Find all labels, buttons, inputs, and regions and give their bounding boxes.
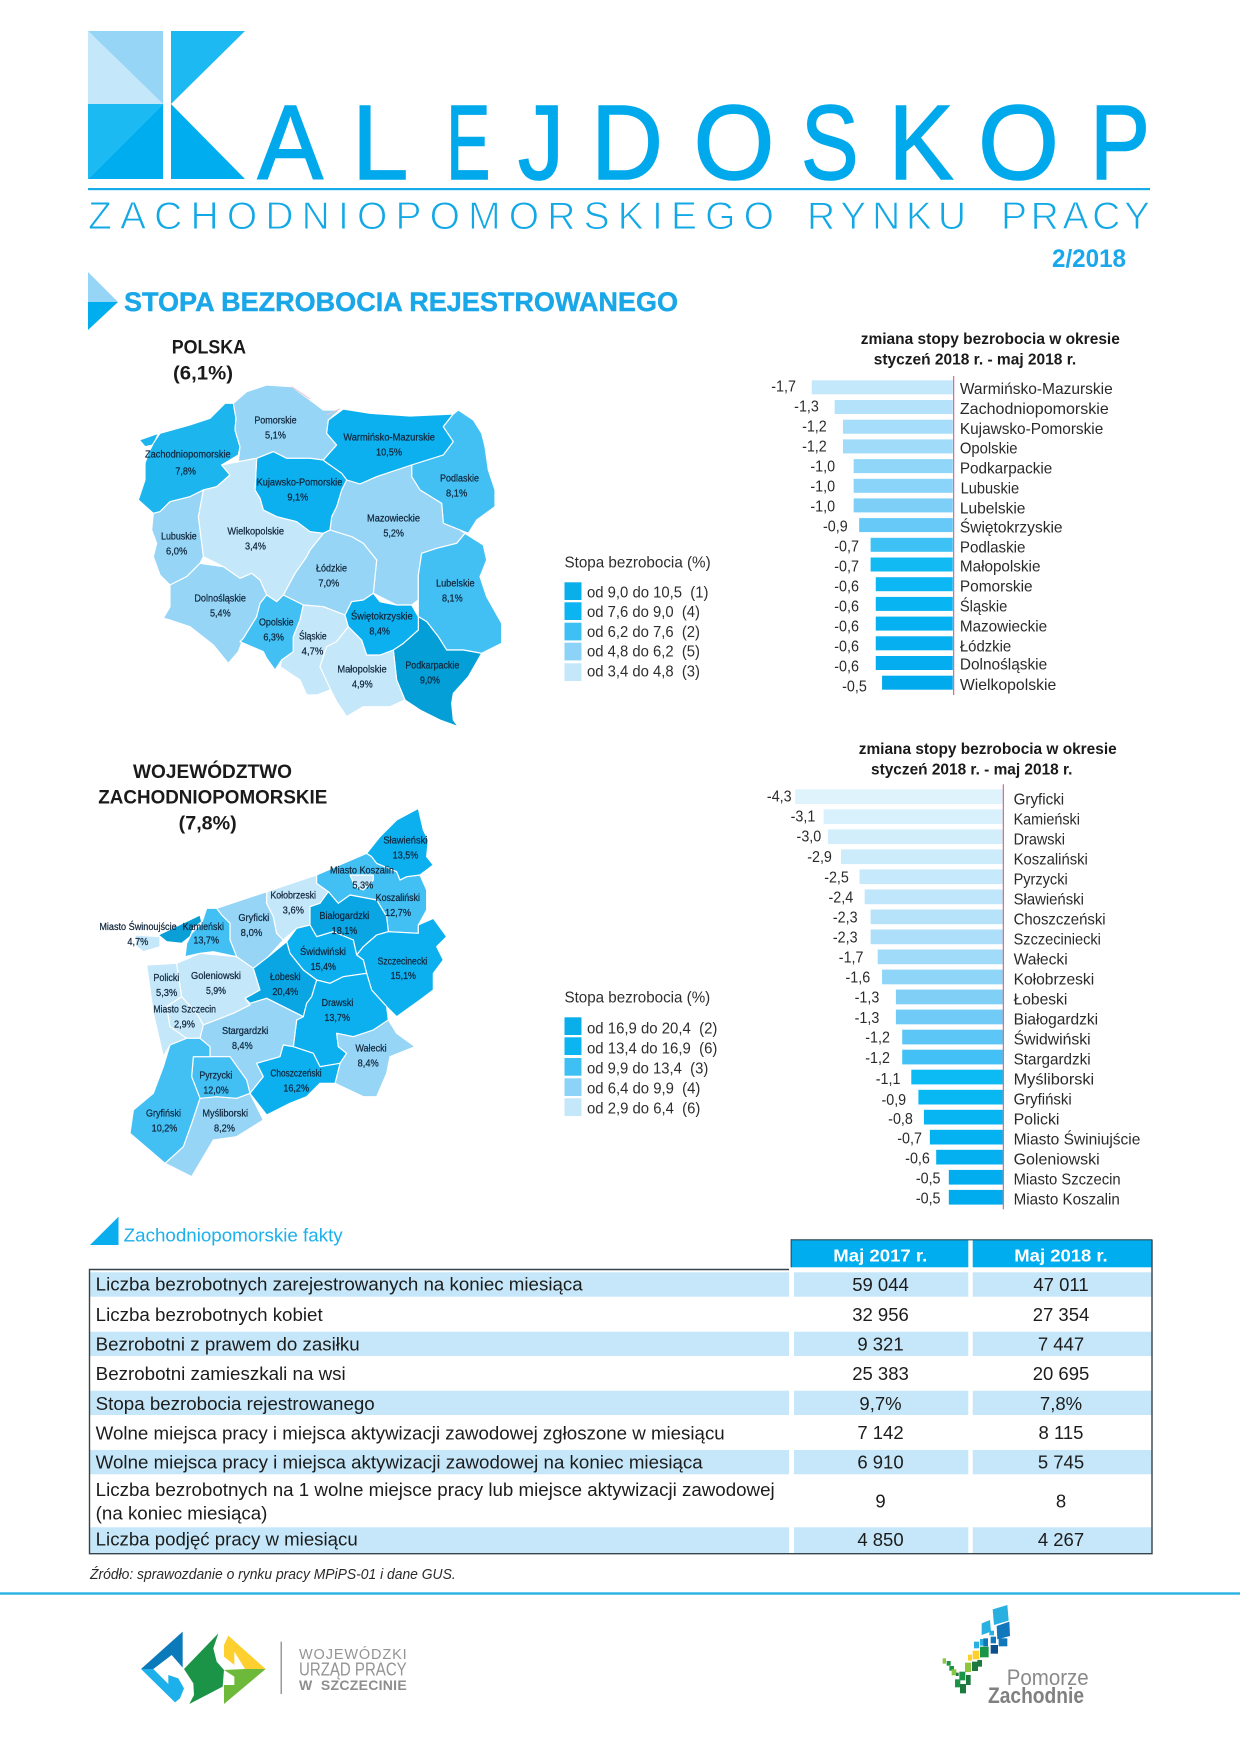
map: Zachodniopomorskie by county: Kołobrzeski	[270, 890, 316, 901]
legend: Zachodniopomorskie: od 6,4 do 9,9 (4)	[587, 1080, 700, 1097]
title: Kalejdoskop: P	[1090, 84, 1150, 202]
bar chart: Zachodniopomorskie change: -0,9	[881, 1092, 906, 1109]
section heading: STOPA BEZROBOCIA REJESTROWANEGO	[124, 287, 678, 317]
heading: Województwo zachodniopomorskie: ZACHODNIOPOMORSKIE	[98, 787, 327, 808]
bar chart: Zachodniopomorskie change: -1,2	[865, 1029, 890, 1047]
table values: Maj 2018: 4 267	[1038, 1529, 1084, 1550]
heading: Województwo zachodniopomorskie	[98, 761, 327, 834]
bar chart: Zachodniopomorskie change: Miasto Świniujście	[1014, 1129, 1141, 1148]
heading: Polska: (6,1%)	[173, 363, 233, 384]
subtitle: ZACHODNIOPOMORSKIEGO	[88, 195, 774, 238]
map: Zachodniopomorskie by county: 8,0%	[241, 928, 262, 939]
bar chart: Zachodniopomorskie change: Pyrzycki	[1014, 871, 1068, 888]
map: Zachodniopomorskie by county: 2,9%	[174, 1019, 195, 1030]
bar chart: Zachodniopomorskie change: Choszczeński	[1014, 911, 1106, 928]
bar chart: Zachodniopomorskie change: -2,4	[829, 889, 854, 907]
bar chart: Zachodniopomorskie change: Białogardzki	[1014, 1011, 1098, 1028]
map: Polska by voivodeship: Kujawsko-Pomorskie	[257, 477, 343, 488]
bar chart: Zachodniopomorskie change: -2,3	[833, 909, 858, 927]
bar chart: Zachodniopomorskie change: Sławieński	[1014, 891, 1084, 908]
legend: Polska: od 9,0 do 10,5 (1)	[587, 584, 708, 601]
table values: Maj 2018: 8 115	[1039, 1422, 1083, 1443]
map: Polska by voivodeship: 9,0%	[420, 675, 440, 686]
bar chart: Zachodniopomorskie change: Gryficki	[1014, 791, 1064, 808]
legend: Polska	[564, 554, 711, 681]
map: Polska by voivodeship: Śląskie	[299, 629, 327, 642]
bar chart: Zachodniopomorskie change: -2,5	[824, 869, 849, 887]
map: Zachodniopomorskie by county: Wałecki	[355, 1044, 387, 1055]
title: Kalejdoskop: D	[591, 84, 663, 202]
bar chart: Polska change: -1,7	[771, 378, 796, 396]
map: Zachodniopomorskie by county: 4,7%	[127, 937, 148, 948]
map: Polska by voivodeship: Mazowieckie	[367, 513, 420, 524]
bar chart: Polska change: Małopolskie	[960, 558, 1041, 575]
chart title: Polska change	[861, 331, 1120, 368]
table row labels: Bezrobotni z prawem do zasiłku	[96, 1334, 360, 1355]
table row labels: Liczba podjęć pracy w miesiącu	[96, 1529, 358, 1550]
legend: Zachodniopomorskie: od 9,9 do 13,4 (3)	[587, 1060, 708, 1077]
title: Kalejdoskop: O	[694, 84, 774, 202]
table row stripes	[90, 1272, 1152, 1553]
map: Polska by voivodeship: 8,4%	[369, 626, 390, 637]
logo separator and Wojewódzki Urząd Pracy wordmark: WOJEWÓDZKI	[299, 1646, 407, 1663]
bar chart: Zachodniopomorskie change: Drawski	[1014, 831, 1065, 848]
logo: Pomorze Zachodnie wordmark: Zachodnie	[988, 1683, 1084, 1708]
map: Zachodniopomorskie by county: Miasto Świnoujście	[99, 920, 177, 933]
subtitle: PRACY	[1001, 195, 1150, 238]
subtitle	[88, 195, 1150, 238]
title: Kalejdoskop: O	[978, 84, 1059, 202]
bar chart: Zachodniopomorskie change: Koszaliński	[1014, 851, 1088, 868]
logo: Pomorze Zachodnie wordmark	[988, 1665, 1089, 1708]
bar chart: Polska change: -0,9	[823, 518, 848, 536]
bar chart: Zachodniopomorskie change: -1,3	[855, 989, 879, 1007]
map: Polska by voivodeship: Łódzkie	[316, 563, 347, 574]
map: Zachodniopomorskie by county: Łobeski	[270, 972, 301, 983]
bar chart: Zachodniopomorskie change: Miasto Koszalin	[1014, 1191, 1120, 1208]
table row labels: Bezrobotni zamieszkali na wsi	[96, 1363, 346, 1384]
map: Polska by voivodeship: Małopolskie	[337, 664, 387, 675]
bar chart: Polska change: -1,2	[802, 418, 827, 436]
map: Zachodniopomorskie by county: Drawski	[322, 998, 353, 1009]
bar chart: Polska change: Opolskie	[960, 440, 1018, 457]
table values: Maj 2017: 9	[875, 1491, 886, 1512]
bar chart: Zachodniopomorskie change: -2,3	[833, 929, 858, 947]
bar chart: Polska change: -1,0	[810, 498, 835, 516]
table values: Maj 2017: 6 910	[857, 1452, 904, 1473]
map: Polska by voivodeship: Świętokrzyskie	[351, 609, 413, 622]
map: Zachodniopomorskie by county: Miasto Szczecin	[153, 1004, 216, 1015]
map: Zachodniopomorskie by county: Stargardzki	[222, 1026, 268, 1037]
bar chart: Zachodniopomorskie change: -0,5	[916, 1190, 941, 1208]
bar chart: Zachodniopomorskie change: Goleniowski	[1014, 1151, 1100, 1168]
heading: Województwo zachodniopomorskie: (7,8%)	[179, 813, 237, 834]
bar chart: Polska change: -0,6	[834, 638, 859, 656]
bar chart: Polska change: -0,7	[834, 558, 859, 576]
bar chart: Zachodniopomorskie change: -4,3	[767, 788, 792, 806]
map: Zachodniopomorskie by county: Choszczeński	[270, 1069, 322, 1080]
table values: Maj 2018: 20 695	[1033, 1363, 1089, 1384]
bar chart: Polska change: -1,3	[794, 398, 819, 416]
footer rule	[0, 1592, 1240, 1595]
map: Zachodniopomorskie by county: Gryfiński	[146, 1109, 181, 1120]
bar chart: Zachodniopomorskie change: -3,1	[791, 808, 815, 826]
chart title: Polska change: styczeń 2018 r. - maj 2018 r.	[874, 351, 1076, 368]
bar chart: Zachodniopomorskie change: -0,6	[905, 1150, 930, 1168]
map: Polska by voivodeship: 6,3%	[263, 632, 284, 643]
map: Zachodniopomorskie by county: 8,4%	[232, 1041, 253, 1052]
map: Zachodniopomorskie by county: Myśliborski	[202, 1109, 248, 1120]
logo: Wojewódzki Urząd Pracy icon	[141, 1632, 266, 1704]
map: Zachodniopomorskie by county: 5,9%	[206, 986, 226, 997]
map: Zachodniopomorskie by county: 12,7%	[385, 908, 411, 919]
table values: Maj 2018	[1033, 1274, 1089, 1550]
map: Zachodniopomorskie by county: Miasto Koszalin	[330, 865, 394, 876]
bar chart: Polska change: Świętokrzyskie	[960, 517, 1063, 536]
logo separator and Wojewódzki Urząd Pracy wordmark	[280, 1642, 407, 1694]
table values: Maj 2017	[852, 1274, 909, 1550]
title: Kalejdoskop: E	[446, 84, 490, 202]
legend: Zachodniopomorskie: od 16,9 do 20,4 (2)	[587, 1020, 717, 1037]
bar chart: Polska change: -1,0	[810, 458, 835, 476]
bar chart: Polska change: Podlaskie	[960, 539, 1026, 556]
map: Zachodniopomorskie by county: 3,6%	[283, 905, 304, 916]
map: Zachodniopomorskie by county	[99, 808, 447, 1177]
legend: Polska: Stopa bezrobocia (%)	[564, 554, 711, 571]
table values: Maj 2017: 4 850	[857, 1529, 904, 1550]
bar chart: Zachodniopomorskie change: -1,6	[846, 969, 870, 987]
map: Polska by voivodeship	[138, 385, 502, 727]
bar chart: Polska change: -0,6	[834, 598, 859, 616]
issue number: 2/2018	[1052, 245, 1126, 273]
bar chart: Polska change: -0,7	[834, 538, 859, 556]
legend: Polska: od 3,4 do 4,8 (3)	[587, 663, 700, 681]
section icon: facts triangle	[90, 1217, 118, 1245]
bar chart: Zachodniopomorskie change: -1,3	[855, 1010, 879, 1027]
heading: facts: Zachodniopomorskie fakty	[124, 1226, 343, 1246]
bar chart: Polska change: -0,6	[834, 618, 859, 636]
map: Polska by voivodeship: 6,0%	[166, 546, 187, 557]
bar chart: Zachodniopomorskie change: Szczeciniecki	[1014, 931, 1101, 948]
map: Polska by voivodeship: Warmińsko-Mazurskie	[343, 432, 435, 443]
map: Zachodniopomorskie by county: Świdwiński	[300, 945, 346, 958]
map: Zachodniopomorskie by county: Gryficki	[238, 913, 269, 924]
bar chart: Polska change: -0,6	[834, 658, 859, 676]
map: Polska by voivodeship: 4,9%	[352, 679, 373, 690]
bar chart: Zachodniopomorskie change: Kołobrzeski	[1014, 971, 1094, 988]
bar chart: Polska change: Pomorskie	[960, 578, 1033, 595]
map: Zachodniopomorskie by county: Szczecinecki	[378, 956, 427, 967]
table row labels: (na koniec miesiąca)	[96, 1502, 267, 1523]
legend: Zachodniopomorskie: od 2,9 do 6,4 (6)	[587, 1100, 700, 1117]
table border	[90, 1240, 1152, 1554]
legend: Polska: od 6,2 do 7,6 (2)	[587, 624, 700, 641]
heading: Polska	[172, 337, 246, 384]
bar chart: Zachodniopomorskie change: -1,7	[839, 949, 864, 967]
chart title: Zachodniopomorskie change	[859, 741, 1117, 778]
map: Zachodniopomorskie by county: 15,1%	[391, 971, 416, 982]
chart title: Polska change: zmiana stopy bezrobocia w okresie	[861, 331, 1120, 348]
bar chart: Polska change: -1,0	[810, 478, 835, 496]
map: Zachodniopomorskie by county: Białogardzki	[319, 911, 369, 922]
bar chart: Polska change: Zachodniopomorskie	[960, 401, 1109, 418]
bar chart: Zachodniopomorskie change: -2,9	[807, 849, 832, 866]
chart title: Zachodniopomorskie change: styczeń 2018 r. - maj 2018 r.	[871, 761, 1072, 778]
table row labels: Wolne miejsca pracy i miejsca aktywizacji zawodowej zgłoszone w miesiącu	[96, 1422, 725, 1443]
map: Zachodniopomorskie by county: 12,0%	[203, 1085, 229, 1096]
table values: Maj 2018: 5 745	[1038, 1452, 1084, 1473]
map: Polska by voivodeship: 5,4%	[210, 608, 231, 619]
bar chart: Zachodniopomorskie change: Stargardzki	[1014, 1051, 1091, 1068]
map: Polska by voivodeship: 9,1%	[287, 492, 308, 503]
map: Polska by voivodeship: Pomorskie	[254, 415, 297, 426]
map: Polska by voivodeship: Opolskie	[259, 617, 294, 628]
legend: Zachodniopomorskie	[564, 989, 717, 1117]
bar chart: Zachodniopomorskie change: Kamieński	[1014, 811, 1080, 828]
map: Polska by voivodeship: Lubuskie	[161, 531, 197, 542]
title: Kalejdoskop: A	[258, 84, 323, 202]
legend: Polska: od 7,6 do 9,0 (4)	[587, 604, 700, 621]
map: Zachodniopomorskie by county: Goleniowski	[191, 971, 241, 982]
map: Polska by voivodeship: 3,4%	[245, 541, 266, 552]
chart title: Zachodniopomorskie change: zmiana stopy bezrobocia w okresie	[859, 741, 1117, 758]
map: Polska by voivodeship: 8,1%	[446, 488, 467, 499]
table header: Maj 2017 r.	[833, 1246, 927, 1266]
title: Kalejdoskop: J	[518, 84, 564, 202]
bar chart: Polska change: Śląskie	[960, 596, 1007, 615]
table values: Maj 2018: 7 447	[1038, 1334, 1084, 1355]
subtitle: RYNKU	[807, 195, 966, 238]
bar chart: Zachodniopomorskie change	[767, 784, 1141, 1209]
title: Kalejdoskop: K	[888, 84, 954, 202]
bar chart: Zachodniopomorskie change: Łobeski	[1014, 991, 1067, 1008]
bar chart: Zachodniopomorskie change: Wałecki	[1014, 951, 1068, 968]
bar chart: Polska change: -0,6	[834, 578, 859, 596]
bar chart: Zachodniopomorskie change: Świdwiński	[1014, 1029, 1091, 1048]
table values: Maj 2018: 47 011	[1033, 1274, 1089, 1295]
map: Zachodniopomorskie by county: Policki	[153, 973, 179, 984]
logo separator and Wojewódzki Urząd Pracy wordmark: W SZCZECINIE	[299, 1677, 407, 1693]
bar chart: Polska change: Dolnośląskie	[960, 656, 1047, 673]
legend: Zachodniopomorskie: Stopa bezrobocia (%)	[564, 989, 710, 1006]
bar chart: Zachodniopomorskie change: -0,7	[897, 1130, 922, 1148]
map: Zachodniopomorskie by county: Koszaliński	[376, 893, 420, 904]
bar chart: Zachodniopomorskie change: Myśliborski	[1014, 1071, 1094, 1088]
map: Zachodniopomorskie by county: 16,2%	[283, 1084, 309, 1095]
map: Polska by voivodeship: Podlaskie	[440, 473, 479, 484]
bar chart: Zachodniopomorskie change: -0,5	[916, 1170, 941, 1188]
legend: Polska: od 4,8 do 6,2 (5)	[587, 643, 700, 661]
map: Zachodniopomorskie by county: 5,3%	[352, 880, 373, 891]
table row labels: Wolne miejsca pracy i miejsca aktywizacji zawodowej na koniec miesiąca	[96, 1452, 703, 1473]
map: Polska by voivodeship: 8,1%	[442, 593, 463, 604]
map: Zachodniopomorskie by county: 10,2%	[152, 1124, 177, 1135]
bar chart: Polska change: -0,5	[842, 678, 867, 696]
map: Zachodniopomorskie by county: Kamieński	[183, 922, 224, 933]
map: Zachodniopomorskie by county: 8,4%	[358, 1059, 379, 1070]
bar chart: Polska change: Wielkopolskie	[960, 677, 1056, 694]
section icon: arrow	[88, 272, 118, 330]
map: Polska by voivodeship: Lubelskie	[436, 578, 475, 589]
bar chart: Polska change: Warmińsko-Mazurskie	[960, 381, 1113, 398]
table values: Maj 2018: 27 354	[1033, 1304, 1089, 1325]
bar chart: Polska change: Łódzkie	[960, 638, 1011, 655]
map: Zachodniopomorskie by county: Sławieński	[383, 835, 427, 846]
map: Zachodniopomorskie by county: 13,7%	[324, 1013, 350, 1024]
bar chart: Polska change	[771, 376, 1113, 696]
map: Zachodniopomorskie by county: 13,5%	[393, 850, 418, 861]
table values: Maj 2018: 7,8%	[1040, 1393, 1082, 1414]
table values: Maj 2017: 9,7%	[859, 1393, 902, 1414]
source note: Źródło: sprawozdanie o rynku pracy MPiPS-01 i dane GUS.	[89, 1566, 456, 1583]
bar chart: Zachodniopomorskie change: Gryfiński	[1014, 1091, 1072, 1108]
bar chart: Polska change: Podkarpackie	[960, 460, 1052, 477]
title: Kalejdoskop: S	[801, 84, 858, 202]
map: Polska by voivodeship: 5,1%	[265, 430, 286, 441]
bar chart: Polska change: Lubelskie	[960, 500, 1026, 517]
table header: Maj 2018 r.	[1014, 1246, 1108, 1266]
map: Zachodniopomorskie by county: 5,3%	[156, 988, 177, 999]
bar chart: Zachodniopomorskie change: -1,2	[865, 1050, 890, 1067]
table values: Maj 2017: 59 044	[852, 1274, 909, 1295]
table row labels: Liczba bezrobotnych na 1 wolne miejsce pracy lub miejsce aktywizacji zawodowej	[96, 1479, 775, 1500]
table row labels: Liczba bezrobotnych zarejestrowanych na koniec miesiąca	[96, 1274, 583, 1295]
heading: Województwo zachodniopomorskie: WOJEWÓDZTWO	[133, 761, 292, 783]
map: Zachodniopomorskie by county: 20,4%	[272, 987, 298, 998]
legend: Zachodniopomorskie: od 13,4 do 16,9 (6)	[587, 1040, 717, 1057]
table header	[791, 1239, 1152, 1267]
map: Zachodniopomorskie by county: Pyrzycki	[199, 1070, 232, 1081]
masthead logo: letter K of triangles	[88, 31, 245, 179]
table: facts	[90, 1239, 1152, 1554]
table row labels: Stopa bezrobocia rejestrowanego	[96, 1393, 375, 1414]
table values: Maj 2017: 7 142	[857, 1422, 904, 1443]
bar chart: Zachodniopomorskie change: -3,0	[797, 828, 821, 846]
bar chart: Zachodniopomorskie change: Policki	[1014, 1111, 1059, 1128]
map: Zachodniopomorskie by county: 8,2%	[214, 1124, 235, 1135]
table row labels	[96, 1274, 775, 1550]
map: Polska by voivodeship: Wielkopolskie	[227, 526, 284, 537]
table row labels: Liczba bezrobotnych kobiet	[96, 1304, 323, 1325]
map: Polska by voivodeship: 7,8%	[175, 466, 196, 477]
bar chart: Polska change: Lubuskie	[961, 480, 1019, 497]
map: Zachodniopomorskie by county: 15,4%	[311, 962, 336, 973]
map: Zachodniopomorskie by county: 13,7%	[193, 935, 219, 946]
map: Polska by voivodeship: 4,7%	[302, 646, 323, 657]
map: Polska by voivodeship: 10,5%	[376, 447, 402, 458]
map: Zachodniopomorskie by county: 18,1%	[332, 926, 357, 937]
bar chart: Zachodniopomorskie change: -0,8	[888, 1111, 913, 1128]
logo: Pomorze Zachodnie wordmark: Pomorze	[1007, 1665, 1089, 1690]
header rule	[88, 188, 1150, 190]
map: Polska by voivodeship: Dolnośląskie	[194, 593, 246, 604]
title: Kalejdoskop	[258, 84, 1150, 202]
map: Polska by voivodeship: Zachodniopomorskie	[145, 450, 231, 461]
heading: Polska: POLSKA	[172, 337, 246, 358]
bar chart: Zachodniopomorskie change: Miasto Szczecin	[1014, 1171, 1121, 1188]
logo: Pomorze Zachodnie icon	[943, 1605, 1010, 1693]
table values: Maj 2017: 32 956	[852, 1304, 909, 1325]
bar chart: Zachodniopomorskie change: -1,1	[876, 1071, 900, 1088]
bar chart: Polska change: Kujawsko-Pomorskie	[960, 421, 1103, 438]
map: Polska by voivodeship: 5,2%	[383, 528, 404, 539]
map: Polska by voivodeship: Podkarpackie	[405, 660, 460, 671]
bar chart: Polska change: Mazowieckie	[960, 618, 1047, 635]
title: Kalejdoskop: L	[352, 84, 408, 202]
table values: Maj 2017: 9 321	[857, 1334, 904, 1355]
logo separator and Wojewódzki Urząd Pracy wordmark: URZĄD PRACY	[299, 1660, 407, 1680]
table values: Maj 2018: 8	[1056, 1491, 1066, 1512]
table values: Maj 2017: 25 383	[852, 1363, 909, 1384]
map: Polska by voivodeship: 7,0%	[318, 578, 339, 589]
bar chart: Polska change: -1,2	[802, 438, 827, 456]
